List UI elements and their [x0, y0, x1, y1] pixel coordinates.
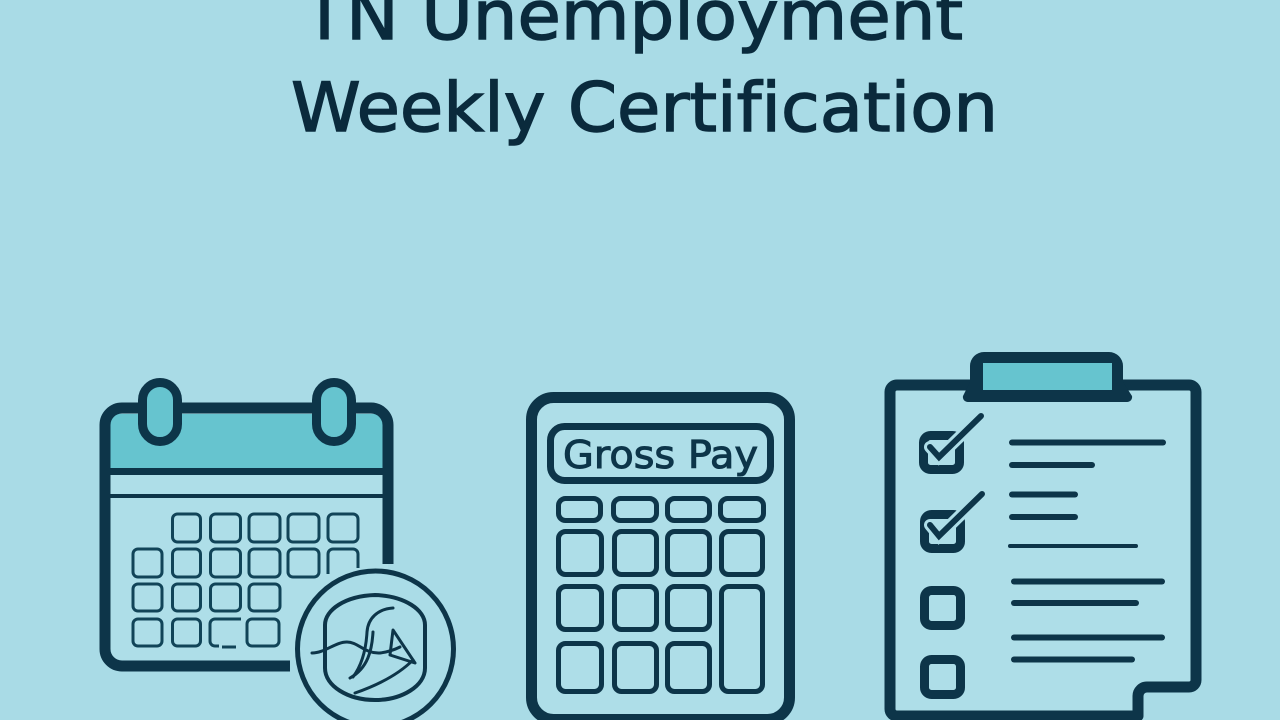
icon: calendar with signature seal [105, 382, 454, 720]
calculator body [532, 398, 790, 720]
checklist text lines [1010, 442, 1163, 660]
checklist tick marks [930, 414, 984, 536]
checklist checkboxes [924, 436, 960, 694]
calendar page body [105, 408, 388, 660]
calendar header band [110, 414, 383, 469]
clipboard clip [963, 352, 1132, 402]
calendar header dividers [110, 472, 383, 496]
title: Weekly Certification [291, 69, 998, 148]
title [291, 0, 998, 148]
calculator display [550, 426, 770, 480]
icon: calculator [532, 398, 790, 720]
signature seal [298, 571, 454, 720]
calendar day grid [133, 514, 358, 647]
calculator display: Gross Pay [563, 433, 758, 477]
calendar binder rings [142, 382, 352, 442]
clipboard board [890, 385, 1196, 716]
calendar frame [105, 408, 388, 666]
calculator keys [558, 498, 764, 692]
icon: checklist clipboard [890, 352, 1196, 716]
